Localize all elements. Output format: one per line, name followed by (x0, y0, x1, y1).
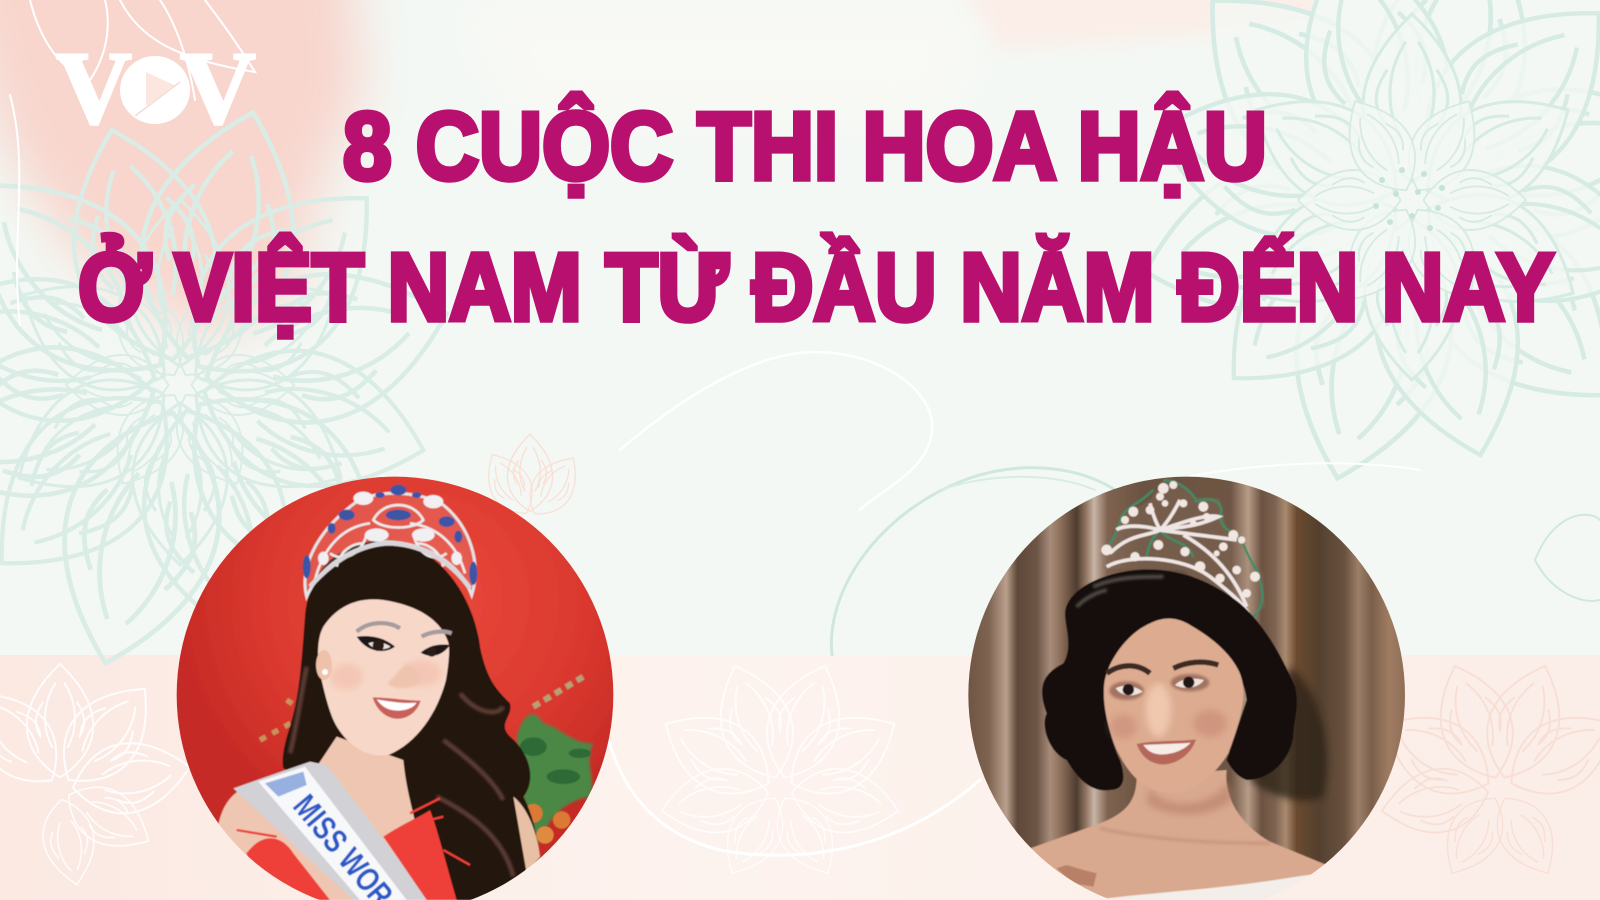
nose (387, 663, 421, 688)
face (1104, 619, 1244, 793)
background foliage and oranges (260, 677, 593, 847)
crown (1100, 480, 1265, 618)
logo: VOV: V (56, 31, 132, 146)
eyes and brows (1107, 662, 1218, 700)
title (78, 92, 1554, 341)
portrait: Miss World Vietnam with blue crown on red background (170, 473, 620, 900)
smile (373, 697, 421, 719)
sash (233, 762, 430, 900)
lotus line art: top right (1127, 0, 1600, 498)
smile (1137, 739, 1196, 764)
logo: VOV: V (180, 31, 256, 146)
lotus line art: bottom in white and pink (0, 434, 1600, 889)
red feather dress (237, 798, 470, 900)
logo: VOV (56, 31, 256, 146)
hair (283, 540, 537, 900)
title line 1: 8 CUỘC THI HOA HẬU (343, 92, 1267, 200)
white dress (1106, 874, 1312, 900)
face (318, 598, 449, 756)
hair (1042, 569, 1297, 790)
lotus line art: left (0, 93, 465, 683)
nails (1057, 865, 1097, 887)
portrait: beauty queen with pearl crown and curtain background (963, 473, 1410, 900)
shadow behind hair (1250, 667, 1327, 801)
skin: neck and shoulders (218, 737, 417, 900)
crown (303, 485, 477, 597)
eyes and brows (357, 623, 452, 657)
skin: neck, shoulders and chest (1030, 770, 1327, 900)
